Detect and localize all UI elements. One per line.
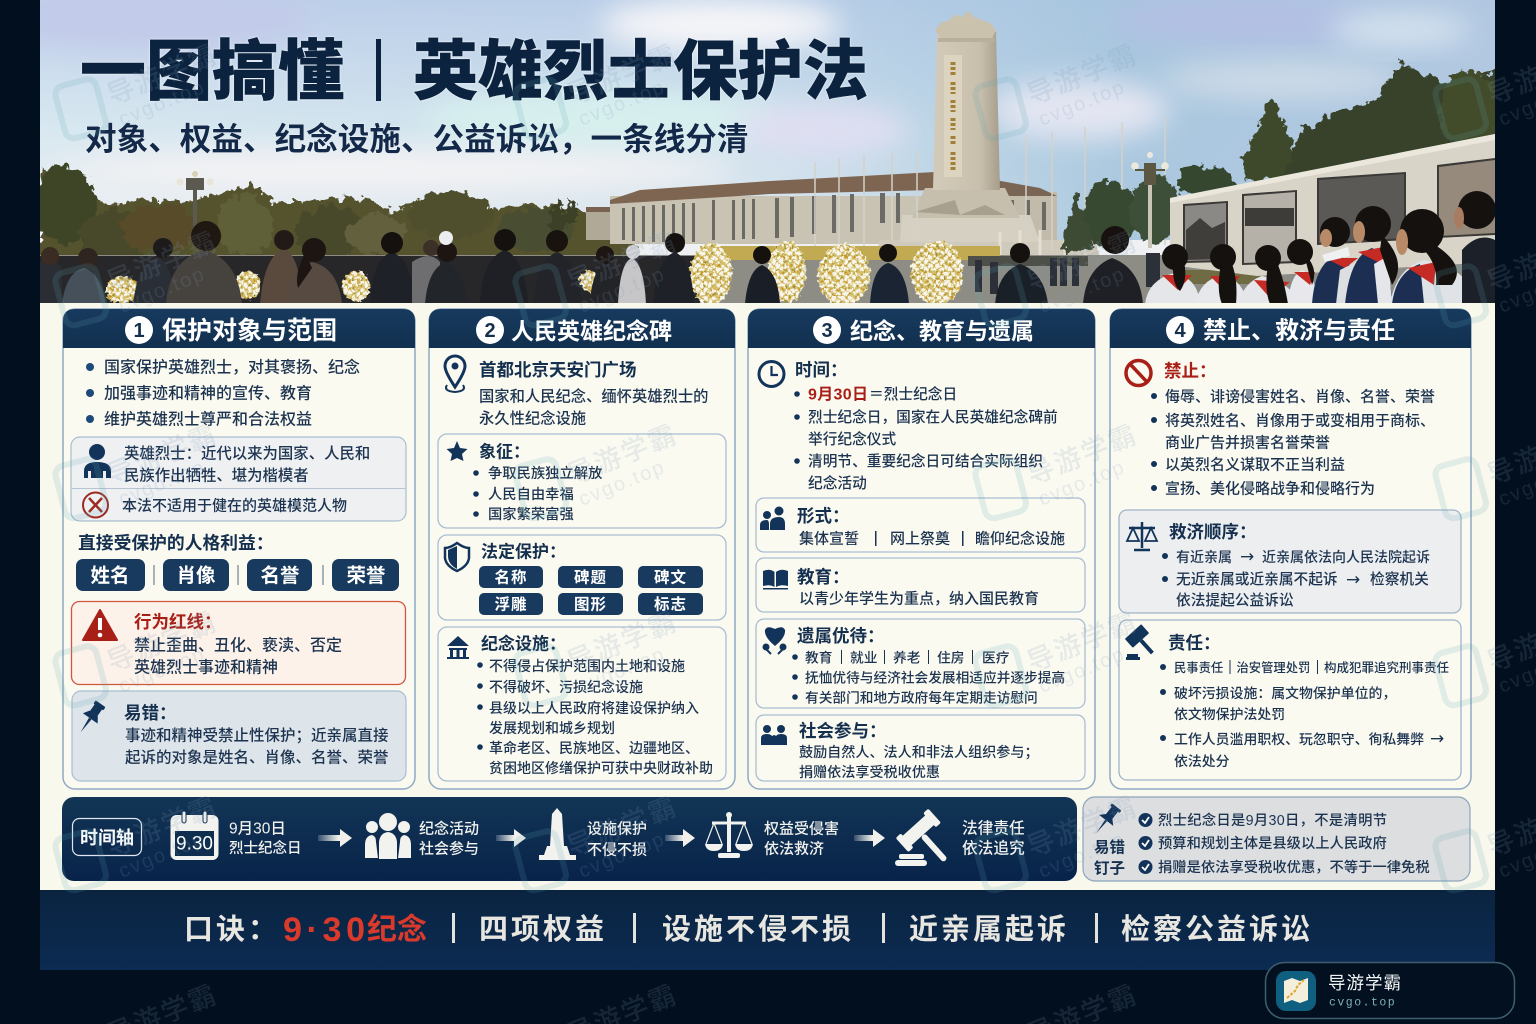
step 2: people: 纪念活动 bbox=[419, 820, 479, 838]
callout: behavior red line: 英雄烈士事迹和精神 bbox=[134, 658, 278, 676]
icon: scales bbox=[1127, 522, 1157, 550]
box: education: 以青少年学生为重点，纳入国民教育 bbox=[799, 590, 1039, 608]
watermark pattern: cvgo.top bbox=[116, 643, 209, 698]
icon: star bbox=[446, 441, 468, 461]
panel 2 header: 2 bbox=[484, 320, 496, 342]
box: remedy order: 近亲属依法向人民法院起诉 bbox=[1262, 549, 1430, 565]
box: remedy order: 依法提起公益诉讼 bbox=[1176, 592, 1294, 609]
box: education: 教育： bbox=[797, 567, 850, 587]
box: common pitfalls bbox=[1083, 797, 1470, 881]
arrow bbox=[854, 829, 885, 847]
box: education bbox=[756, 558, 1085, 612]
chips: four rights: 荣誉 bbox=[346, 565, 386, 587]
watermark pattern: 导游学霸 bbox=[1023, 226, 1142, 298]
watermark pattern: 导游学霸 bbox=[563, 39, 682, 111]
icon: person bbox=[84, 444, 111, 478]
icon: two people bbox=[760, 506, 785, 530]
step 1: calendar 9.30: 烈士纪念日 bbox=[229, 839, 302, 857]
step 3: monument bbox=[539, 808, 647, 860]
watermark pattern: 导游学霸 bbox=[563, 791, 682, 863]
location block bbox=[445, 356, 708, 428]
panel 4 header: 禁止、救济与责任 bbox=[1203, 318, 1395, 344]
location block: 首都北京天安门广场 bbox=[479, 360, 636, 380]
wreaths and bouquets bbox=[106, 241, 963, 306]
mnemonic banner bbox=[40, 890, 1495, 970]
box: symbolism bbox=[438, 434, 726, 528]
subtitle: 对象、权益、纪念设施、公益诉讼，一条线分清 bbox=[85, 121, 748, 157]
chips: four rights: 姓名 bbox=[90, 565, 130, 587]
watermark pattern: 导游学霸 bbox=[103, 226, 222, 298]
box: memorial facilities: 不得侵占保护范围内土地和设施 bbox=[489, 658, 685, 674]
panel 2 header bbox=[429, 309, 735, 348]
prohibitions block: 禁止： bbox=[1164, 361, 1216, 381]
box: legal protection: 碑文 bbox=[654, 568, 687, 586]
monument bbox=[875, 11, 1100, 258]
step 2: people: 社会参与 bbox=[419, 840, 479, 858]
callout: common mistake: 起诉的对象是姓名、肖像、名誉、荣誉 bbox=[125, 748, 389, 766]
time block: 纪念活动 bbox=[808, 474, 867, 492]
box: remedy order: 检察机关 bbox=[1370, 570, 1429, 588]
timeline label bbox=[72, 818, 142, 856]
box: memorial facilities: 县级以上人民政府将建设保护纳入 bbox=[489, 700, 699, 716]
box: legal protection: 标志 bbox=[654, 596, 687, 614]
box: remedy order: 有近亲属 bbox=[1176, 549, 1232, 565]
chips: four rights: 名誉 bbox=[260, 565, 300, 587]
box: social participation: 鼓励自然人、法人和非法人组织参与； bbox=[799, 744, 1039, 761]
box: liability: 依文物保护法处罚 bbox=[1174, 706, 1285, 722]
box: liability: 破坏污损设施：属文物保护单位的， bbox=[1174, 685, 1396, 701]
callout: common mistake: 易错： bbox=[124, 703, 176, 723]
box: survivors' benefits: 教育 bbox=[805, 650, 832, 666]
callout: behavior red line bbox=[72, 602, 406, 684]
watermark pattern: cvgo.top bbox=[116, 828, 209, 883]
timeline bar bbox=[62, 797, 1077, 881]
panel 2: monument bbox=[429, 309, 735, 789]
brand badge bbox=[1266, 962, 1514, 1018]
brand badge: cvgo.top bbox=[1329, 996, 1396, 1010]
box: survivors' benefits: 养老 bbox=[893, 650, 921, 666]
step 3: monument: 设施保护 bbox=[587, 820, 647, 838]
box: form: 集体宣誓 bbox=[799, 530, 859, 548]
prohibitions block: 商业广告并损害名誉荣誉 bbox=[1165, 434, 1330, 452]
box: remedy order: 救济顺序： bbox=[1169, 522, 1256, 542]
mnemonic banner: 纪念 bbox=[367, 912, 427, 946]
time block: 时间： bbox=[795, 360, 848, 380]
watermark pattern: 导游学霸 bbox=[1023, 791, 1142, 863]
panel 1 header: 保护对象与范围 bbox=[162, 317, 337, 345]
chips: four rights bbox=[76, 559, 399, 591]
box: remedy order bbox=[1119, 510, 1461, 613]
definition box: heroes and martyrs: 本法不适用于健在的英雄模范人物 bbox=[122, 496, 347, 514]
heading: personality interests: 直接受保护的人格利益： bbox=[78, 532, 274, 553]
panel 4: prohibitions, remedies, liability bbox=[1110, 309, 1471, 789]
watermark pattern: 导游学霸 bbox=[563, 226, 682, 298]
flag poles bbox=[815, 116, 1165, 255]
watermark pattern: cvgo.top bbox=[116, 456, 209, 511]
mnemonic banner: 口诀： bbox=[184, 913, 280, 946]
watermark pattern: cvgo.top bbox=[1036, 263, 1129, 318]
prohibitions block: 侮辱、诽谤侵害姓名、肖像、名誉、荣誉 bbox=[1165, 388, 1435, 406]
mnemonic banner: 检察公益诉讼 bbox=[1121, 913, 1313, 946]
box: legal protection: 法定保护： bbox=[481, 542, 566, 562]
callout: common mistake: 事迹和精神受禁止性保护；近亲属直接 bbox=[125, 726, 389, 744]
panel 1 bullet list: 加强事迹和精神的宣传、教育 bbox=[104, 384, 312, 402]
step 2: people bbox=[365, 813, 479, 859]
watermark pattern: 导游学霸 bbox=[1023, 39, 1142, 111]
icon: three people bbox=[761, 725, 787, 745]
watermark pattern: 导游学霸 bbox=[1023, 606, 1142, 678]
mnemonic banner: 设施不侵不损 bbox=[662, 913, 854, 946]
box: liability: 责任： bbox=[1168, 633, 1220, 653]
box: form: 形式： bbox=[797, 506, 850, 526]
box: memorial facilities bbox=[438, 627, 726, 781]
watermark pattern: 导游学霸 bbox=[563, 419, 682, 491]
box: liability: 构成犯罪追究刑事责任 bbox=[1324, 660, 1450, 675]
prohibitions block: 以英烈名义谋取不正当利益 bbox=[1165, 456, 1345, 474]
chips: four rights: 肖像 bbox=[176, 565, 216, 587]
box: symbolism: 争取民族独立解放 bbox=[488, 464, 602, 482]
box: remedy order: → bbox=[1346, 570, 1360, 590]
time block: 举行纪念仪式 bbox=[808, 430, 896, 448]
icon: open book bbox=[763, 570, 788, 590]
time block bbox=[759, 360, 1058, 492]
crowd silhouettes bbox=[40, 221, 1143, 304]
watermark pattern: 导游学霸 bbox=[103, 606, 222, 678]
box: common pitfalls: 钉子 bbox=[1094, 860, 1125, 878]
panel 1 header bbox=[63, 309, 415, 348]
box: symbolism: 人民自由幸福 bbox=[488, 486, 574, 503]
box: symbolism: 国家繁荣富强 bbox=[488, 505, 574, 523]
box: social participation: 社会参与： bbox=[799, 721, 886, 741]
title bbox=[80, 34, 868, 108]
watermark pattern: 导游学霸 bbox=[1023, 419, 1142, 491]
title: 一图搞懂 bbox=[80, 34, 344, 108]
panel 1 bullet list bbox=[86, 358, 360, 428]
panel 1: protected subjects and scope bbox=[63, 309, 415, 789]
panel 3 header: 3 bbox=[821, 320, 833, 342]
box: liability: 依法处分 bbox=[1174, 753, 1230, 769]
box: liability: 民事责任 bbox=[1174, 661, 1223, 675]
title: 英雄烈士保护法 bbox=[413, 34, 868, 108]
icon: map pin bbox=[445, 356, 465, 392]
watermark pattern: 导游学霸 bbox=[563, 606, 682, 678]
students with red scarves bbox=[1145, 191, 1496, 304]
icon: brand map bbox=[1276, 971, 1316, 1011]
icon: gavel bbox=[1125, 624, 1161, 660]
step 5: gavel: 依法追究 bbox=[962, 838, 1025, 858]
box: common pitfalls: 烈士纪念日是9月30日，不是清明节 bbox=[1158, 811, 1387, 829]
great hall bbox=[586, 172, 1057, 244]
panel 1 bullet list: 国家保护英雄烈士，对其褒扬、纪念 bbox=[104, 358, 360, 376]
box: social participation: 捐赠依法享受税收优惠 bbox=[799, 764, 940, 780]
prohibitions block bbox=[1126, 360, 1435, 498]
box: survivors' benefits: 医疗 bbox=[982, 650, 1010, 666]
box: liability: 工作人员滥用职权、玩忽职守、徇私舞弊 bbox=[1174, 731, 1424, 747]
icon: clock bbox=[759, 362, 784, 386]
step 3: monument: 不侵不损 bbox=[587, 842, 647, 858]
time block: 9月30日 bbox=[808, 386, 868, 404]
watermark pattern: 导游学霸 bbox=[103, 419, 222, 491]
hero photo: monument square scene bbox=[0, 0, 1500, 306]
box: legal protection: 名称 bbox=[494, 568, 528, 586]
icon: pushpin bbox=[73, 699, 108, 738]
lamp right bbox=[1131, 152, 1169, 248]
box: memorial facilities: 纪念设施： bbox=[481, 634, 566, 654]
watermark pattern: cvgo.top bbox=[1036, 76, 1129, 131]
mnemonic banner: 四项权益 bbox=[479, 913, 607, 946]
icon: shield bbox=[445, 543, 469, 571]
watermark pattern: cvgo.top bbox=[576, 643, 669, 698]
box: common pitfalls: 捐赠是依法享受税收优惠，不等于一律免税 bbox=[1158, 858, 1430, 876]
time block: 清明节、重要纪念日可结合实际组织 bbox=[808, 452, 1043, 470]
arrow bbox=[496, 829, 526, 847]
arrow bbox=[665, 829, 695, 847]
panel 3 header: 纪念、教育与遗属 bbox=[850, 318, 1034, 344]
box: social participation bbox=[756, 715, 1085, 781]
box: form: 瞻仰纪念设施 bbox=[975, 530, 1065, 548]
prohibitions block: 宣扬、美化侵略战争和侵略行为 bbox=[1165, 480, 1375, 498]
watermark pattern: 导游学霸 bbox=[103, 791, 222, 863]
panel 4 header bbox=[1110, 309, 1471, 348]
box: form bbox=[756, 498, 1085, 552]
icon: heart in hands bbox=[762, 627, 786, 654]
memorial wall with photos bbox=[1170, 134, 1495, 276]
box: liability bbox=[1119, 620, 1461, 780]
box: memorial facilities: 发展规划和城乡规划 bbox=[489, 720, 615, 736]
arrow bbox=[318, 829, 352, 847]
box: remedy order: 无近亲属或近亲属不起诉 bbox=[1176, 571, 1338, 588]
icon: not applicable bbox=[83, 492, 108, 518]
box: common pitfalls: 易错 bbox=[1094, 838, 1125, 856]
location block: 永久性纪念设施 bbox=[479, 410, 586, 428]
panel 3 header bbox=[748, 309, 1095, 348]
box: legal protection: 浮雕 bbox=[494, 596, 528, 614]
location block: 国家和人民纪念、缅怀英雄烈士的 bbox=[479, 388, 708, 406]
box: survivors' benefits: 遗属优待： bbox=[797, 626, 884, 646]
icon: memorial hall bbox=[447, 636, 469, 659]
watermark pattern: cvgo.top bbox=[576, 456, 669, 511]
box: survivors' benefits: 住房 bbox=[937, 650, 964, 666]
definition box: heroes and martyrs bbox=[71, 437, 406, 521]
panel 1 bullet list: 维护英雄烈士尊严和合法权益 bbox=[104, 410, 312, 428]
watermark pattern: cvgo.top bbox=[576, 828, 669, 883]
trees right bbox=[1060, 62, 1500, 250]
watermark pattern: cvgo.top bbox=[576, 263, 669, 318]
box: legal protection bbox=[438, 535, 726, 620]
definition box: heroes and martyrs: 民族作出牺牲、堪为楷模者 bbox=[124, 466, 309, 484]
far crowd and ground bbox=[40, 246, 1495, 304]
step 1: calendar 9.30 bbox=[170, 811, 302, 860]
mnemonic banner: 9·30 bbox=[283, 911, 365, 949]
brand badge: 导游学霸 bbox=[1328, 973, 1402, 993]
time block: 烈士纪念日，国家在人民英雄纪念碑前 bbox=[808, 408, 1058, 426]
step 4: scales: 依法救济 bbox=[764, 840, 824, 858]
callout: behavior red line: 行为红线： bbox=[134, 612, 222, 632]
box: legal protection: 图形 bbox=[574, 596, 607, 614]
panel 2 header: 人民英雄纪念碑 bbox=[511, 318, 672, 344]
callout: behavior red line: 禁止歪曲、丑化、亵渎、否定 bbox=[134, 636, 342, 654]
box: symbolism: 象征： bbox=[479, 442, 530, 462]
step 1: calendar 9.30: 9月30日 bbox=[229, 820, 286, 838]
prohibitions block: 将英烈姓名、肖像用于或变相用于商标、 bbox=[1165, 412, 1435, 430]
step 5: gavel bbox=[895, 809, 1025, 875]
box: survivors' benefits bbox=[756, 619, 1085, 708]
step 4: scales: 权益受侵害 bbox=[764, 820, 839, 838]
watermark pattern: 导游学霸 bbox=[103, 39, 222, 111]
step 4: scales bbox=[705, 812, 839, 858]
watermark pattern: cvgo.top bbox=[1036, 456, 1129, 511]
panel 1 header: 1 bbox=[133, 320, 145, 342]
step 1: calendar 9.30: 9.30 bbox=[176, 834, 213, 854]
box: remedy order: → bbox=[1240, 547, 1254, 567]
icon: warning triangle bbox=[83, 610, 117, 640]
mnemonic banner: 近亲属起诉 bbox=[909, 913, 1069, 946]
box: memorial facilities: 不得破坏、污损纪念设施 bbox=[489, 679, 643, 695]
box: survivors' benefits: 就业 bbox=[850, 650, 877, 666]
watermark pattern: cvgo.top bbox=[576, 76, 669, 131]
watermark pattern: cvgo.top bbox=[1036, 643, 1129, 698]
box: survivors' benefits: 抚恤优待与经济社会发展相适应并逐步提高 bbox=[805, 670, 1065, 686]
time block: ＝烈士纪念日 bbox=[869, 385, 957, 403]
panel 4 header: 4 bbox=[1174, 320, 1186, 342]
definition box: heroes and martyrs: 英雄烈士：近代以来为国家、人民和 bbox=[124, 444, 370, 462]
content background bbox=[40, 303, 1495, 890]
watermark pattern: cvgo.top bbox=[1036, 828, 1129, 883]
timeline label: 时间轴 bbox=[80, 828, 134, 848]
box: form: 网上祭奠 bbox=[890, 530, 950, 548]
box: memorial facilities: 贫困地区修缮保护可获中央财政补助 bbox=[489, 760, 713, 776]
box: survivors' benefits: 有关部门和地方政府每年定期走访慰问 bbox=[805, 690, 1038, 706]
icon: prohibited sign bbox=[1126, 360, 1151, 386]
box: liability: 治安管理处罚 bbox=[1236, 660, 1310, 675]
lamp left bbox=[176, 171, 214, 232]
step 5: gavel: 法律责任 bbox=[962, 820, 1025, 838]
trees left bbox=[40, 162, 639, 255]
watermark pattern: cvgo.top bbox=[116, 263, 209, 318]
box: common pitfalls: 预算和规划主体是县级以上人民政府 bbox=[1158, 834, 1387, 852]
icon: pushpin bbox=[1089, 801, 1124, 839]
box: liability: → bbox=[1430, 729, 1444, 749]
callout: common mistake bbox=[72, 691, 406, 781]
box: memorial facilities: 革命老区、民族地区、边疆地区、 bbox=[489, 740, 699, 756]
box: legal protection: 碑题 bbox=[574, 568, 607, 586]
watermark pattern: cvgo.top bbox=[116, 76, 209, 131]
panel 3: commemoration, education, survivors bbox=[748, 309, 1095, 789]
